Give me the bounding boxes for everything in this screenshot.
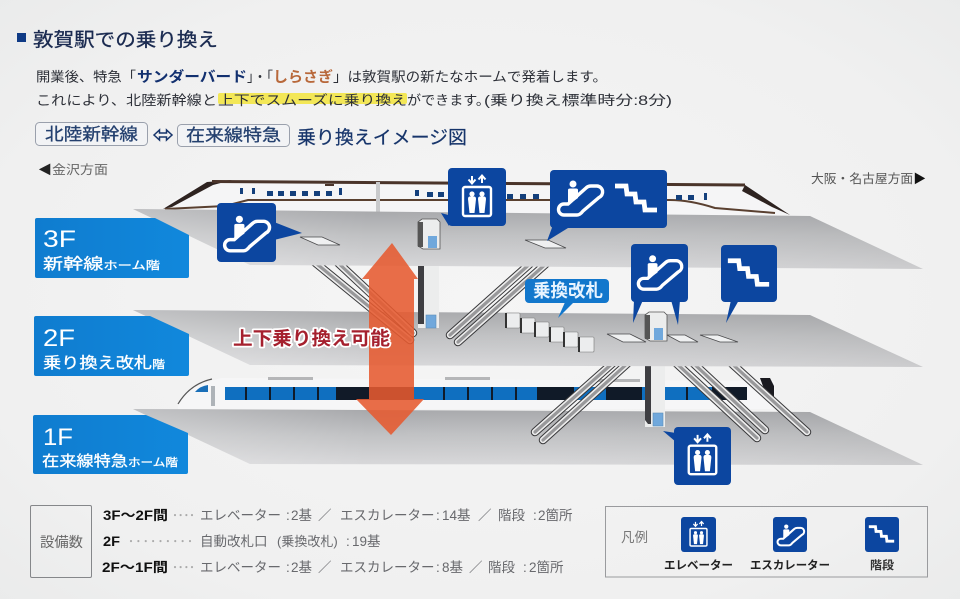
equipment rows: 2基 xyxy=(291,507,313,523)
platform: 2F xyxy=(133,310,923,367)
direction: Osaka Nagoya: 大阪・名古屋方面▶ xyxy=(811,171,926,186)
equipment rows: (乗換改札) xyxy=(277,534,338,549)
legend: stairs: 階段 xyxy=(870,558,895,572)
equipment rows: : xyxy=(286,508,290,523)
yellow highlight xyxy=(218,93,407,104)
image heading: 乗り換えイメージ図 xyxy=(297,127,467,148)
image heading: 北陸新幹線 xyxy=(45,125,138,144)
label: 2F xyxy=(34,316,189,376)
label: 3F: 新幹線 ホーム階 xyxy=(43,255,160,273)
equipment rows: 2箇所 xyxy=(529,559,564,575)
label: 3F xyxy=(35,218,189,278)
intro text xyxy=(36,68,672,108)
legend: stairs xyxy=(865,517,899,572)
equipment rows xyxy=(102,507,573,575)
legend: escalator xyxy=(750,517,830,572)
elevator shaft 2F to 1F xyxy=(645,362,665,427)
label: 1F: 在来線特急 ホーム階 xyxy=(42,453,178,470)
Limited express train xyxy=(178,377,775,409)
equipment count label: 設備数 xyxy=(40,534,83,550)
equipment rows: ・・・・ xyxy=(170,563,197,574)
intro text: 」・「 xyxy=(247,70,273,84)
intro text: ができます。 xyxy=(407,93,490,108)
equipment rows: エレベーター xyxy=(200,508,281,523)
icon: escalator and stairs 3F xyxy=(547,170,667,241)
equipment rows: 8基 xyxy=(442,559,464,575)
equipment rows: エレベーター xyxy=(200,560,281,575)
legend: elevator: エレベーター xyxy=(664,559,733,572)
legend: escalator: エスカレーター xyxy=(750,559,830,572)
callout: transfer gate: 乗換改札 xyxy=(533,281,603,301)
red two-way arrow xyxy=(356,243,424,435)
icon: escalator 2F xyxy=(631,244,688,325)
intro text: (乗り換え標準時分:8分) xyxy=(484,93,672,108)
label: 3F: 3F xyxy=(43,226,76,253)
platform: 3F xyxy=(133,209,923,269)
image heading xyxy=(36,122,467,148)
equipment rows: 2F xyxy=(103,534,120,549)
intro text: 開業後、特急「 xyxy=(36,70,137,84)
image heading: 在来線特急 xyxy=(186,126,281,145)
equipment rows: エスカレーター xyxy=(340,508,434,523)
equipment rows: 2F〜1F間 xyxy=(102,560,168,575)
escalators 2F to 1F xyxy=(535,362,807,440)
label: 2F: 乗り換え改札 階 xyxy=(43,354,165,372)
icon: stairs 2F xyxy=(721,245,777,323)
equipment rows: 自動改札口 xyxy=(200,534,268,549)
equipment rows: ／ xyxy=(478,508,492,523)
legend: elevator xyxy=(664,517,733,572)
equipment rows: 階段 xyxy=(488,560,516,575)
elevator 3F and shaft xyxy=(418,219,440,328)
elevator 2F xyxy=(645,312,667,341)
ticket gates xyxy=(505,313,594,352)
equipment rows: 14基 xyxy=(442,507,471,523)
equipment rows: ／ xyxy=(318,560,332,575)
label: 1F xyxy=(33,415,188,474)
equipment rows: ・・・・ xyxy=(170,511,197,522)
intro text: しらさぎ xyxy=(273,68,334,86)
equipment rows: 2基 xyxy=(291,559,313,575)
equipment rows: 3F〜2F間 xyxy=(103,508,168,523)
equipment rows: : xyxy=(436,508,440,523)
icon: elevator 3F xyxy=(441,168,506,226)
callout: transfer gate xyxy=(525,279,609,318)
legend title: 凡例 xyxy=(621,530,648,545)
platform: 1F xyxy=(133,409,923,465)
equipment rows: : xyxy=(346,534,350,549)
escalators 3F to 2F xyxy=(312,260,548,342)
equipment rows: : xyxy=(436,560,440,575)
direction: Kanazawa: ◀金沢方面 xyxy=(38,162,108,177)
equipment rows: : xyxy=(523,560,527,575)
floor pads xyxy=(300,237,738,342)
equipment count label xyxy=(30,506,92,578)
title: 敦賀駅での乗り換え xyxy=(33,28,218,51)
equipment rows: : xyxy=(286,560,290,575)
label: 1F: 1F xyxy=(43,424,73,451)
label: transfer possible: 上下乗り換え可能 xyxy=(233,328,391,349)
Shinkansen train xyxy=(163,180,790,215)
icon: escalator 3F xyxy=(217,203,302,262)
equipment rows: ・・・・・・・・・ xyxy=(126,537,195,548)
intro text: 上下でスムーズに乗り換え xyxy=(218,93,407,108)
intro text: 」は敦賀駅の新たなホームで発着します。 xyxy=(333,68,607,84)
icon: elevator 1F xyxy=(663,427,731,485)
equipment rows: ／ xyxy=(318,508,332,523)
equipment rows: 19基 xyxy=(352,533,381,549)
equipment rows: エスカレーター xyxy=(340,560,434,575)
equipment rows: 2箇所 xyxy=(538,507,573,523)
panel: legend xyxy=(606,506,928,577)
equipment rows: ／ xyxy=(469,560,483,575)
label: 2F: 2F xyxy=(43,325,75,352)
equipment rows: 階段 xyxy=(498,508,526,523)
intro text: これにより、北陸新幹線と xyxy=(36,93,217,108)
equipment rows: : xyxy=(533,508,537,523)
intro text: サンダーバード xyxy=(137,68,247,86)
